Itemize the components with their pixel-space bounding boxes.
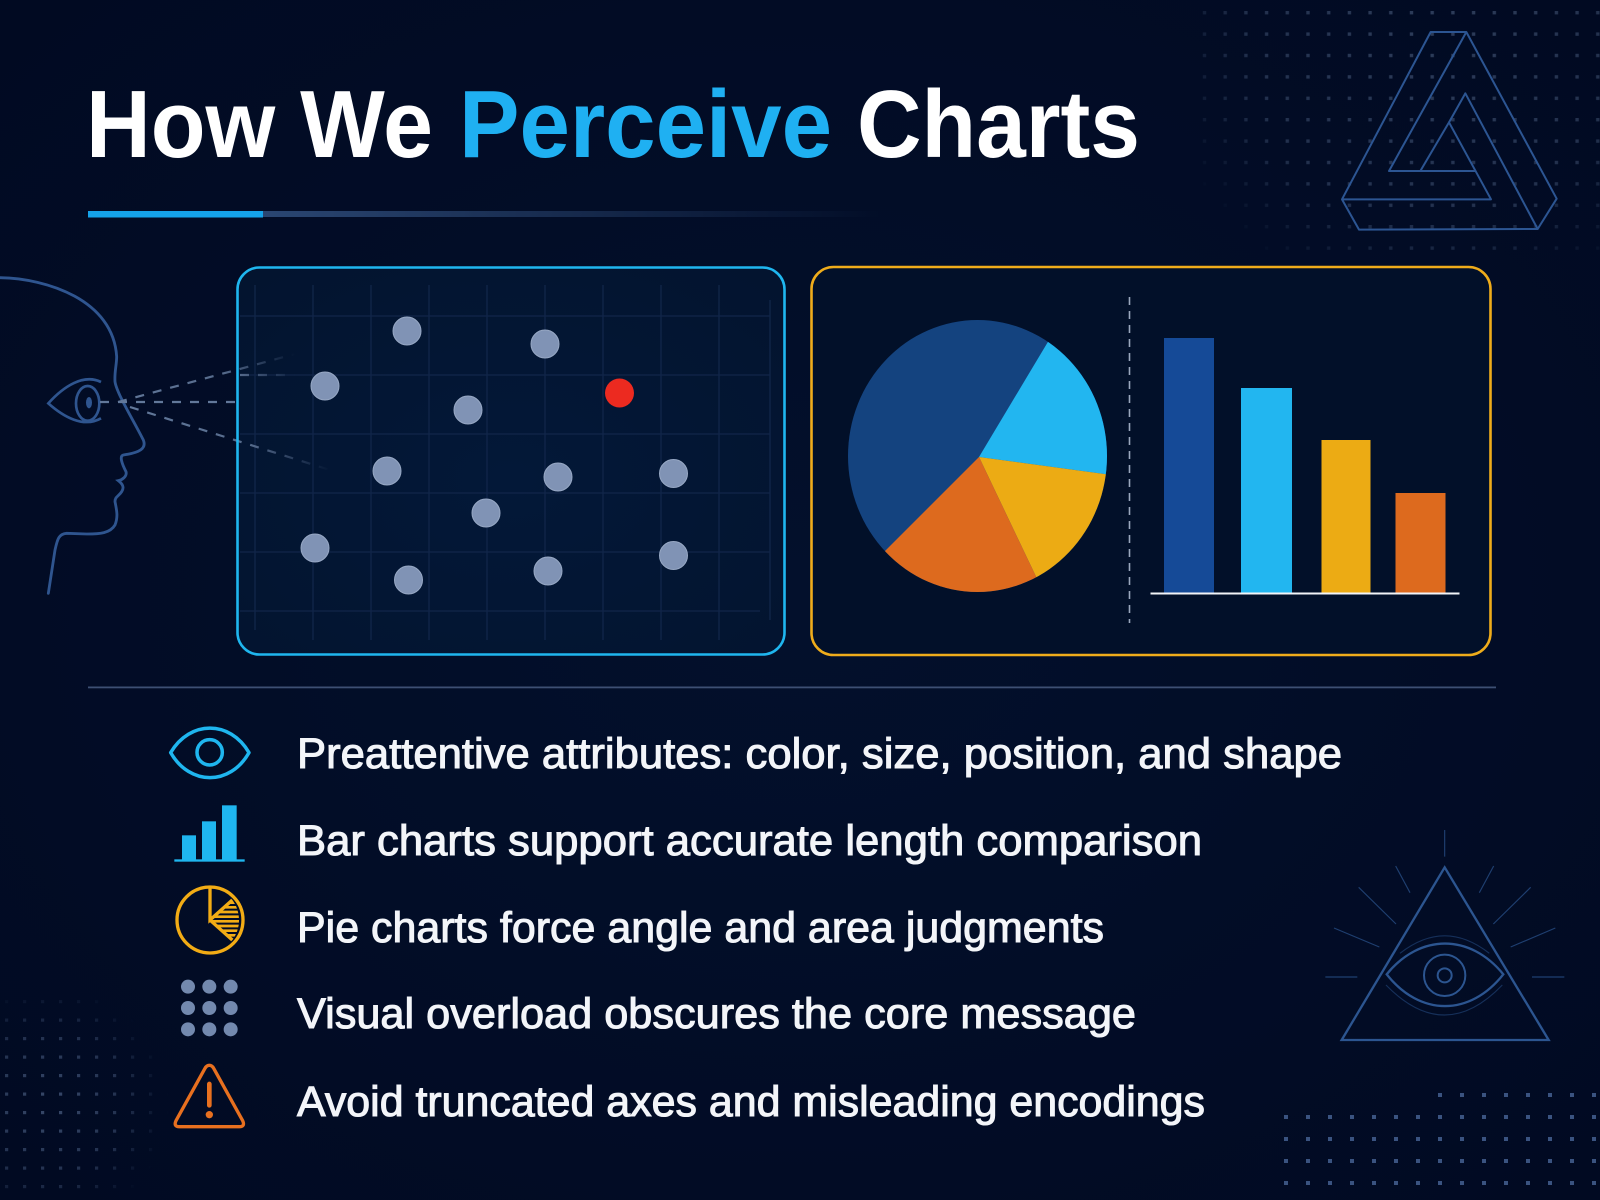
title underline <box>88 211 883 218</box>
bar chart <box>1150 338 1460 594</box>
dashed separator <box>1128 297 1130 623</box>
sight rays <box>100 354 330 470</box>
head profile with eye <box>0 278 144 593</box>
dot pattern: bottom left <box>5 1000 152 1188</box>
scatter dots <box>301 317 688 594</box>
title <box>86 71 1140 178</box>
panel: scatter plot <box>100 268 784 654</box>
panel: pie and bar charts <box>786 267 1490 655</box>
highlighted red dot <box>605 378 634 408</box>
icon: eye <box>171 728 249 778</box>
text: preattentive attributes: Preattentive attributes: color, size, position, and shape <box>297 730 1342 778</box>
icon: dot grid <box>181 980 238 1036</box>
panel border <box>238 268 784 654</box>
title: How We <box>86 71 433 178</box>
text: pie charts: Pie charts force angle and area judgments <box>297 904 1104 952</box>
icon: all-seeing eye in triangle <box>1325 830 1564 1040</box>
dot pattern: bottom right <box>1284 1090 1600 1200</box>
grid lines <box>240 285 770 640</box>
section divider <box>88 686 1496 688</box>
title: Perceive <box>459 71 832 178</box>
text: bar charts: Bar charts support accurate length comparison <box>297 817 1202 865</box>
icon: warning triangle <box>175 1065 243 1127</box>
icon: pie <box>177 887 247 953</box>
text: visual overload: Visual overload obscures the core message <box>297 990 1136 1038</box>
title: Charts <box>857 71 1140 178</box>
dot pattern: top right <box>1202 11 1600 250</box>
text: avoid truncated axes: Avoid truncated axes and misleading encodings <box>297 1078 1205 1126</box>
icon: impossible triangle <box>1342 32 1557 230</box>
pie chart <box>848 320 1107 592</box>
icon: bars <box>174 805 245 862</box>
